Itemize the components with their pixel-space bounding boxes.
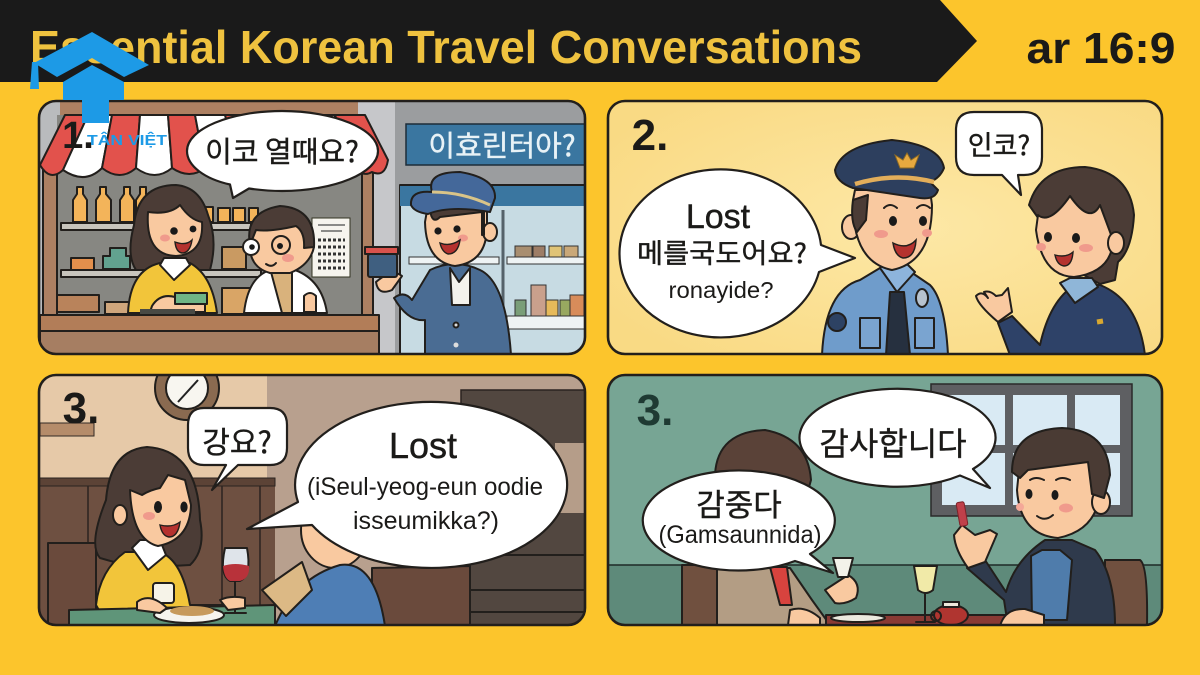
poster (312, 218, 350, 277)
panel 1: shop (38, 100, 588, 355)
panel 3 frame (39, 375, 585, 625)
window (931, 384, 1132, 516)
speech bubble: thanks (800, 389, 996, 488)
title banner (0, 0, 977, 82)
bottles on upper shelf (73, 187, 258, 222)
man from behind (261, 526, 471, 624)
speech bubble: shop: 이코 열때요? (205, 129, 359, 171)
aspect ratio label: ar 16:9 (1026, 24, 1176, 73)
restaurant room (38, 374, 587, 626)
panel 4 frame (608, 375, 1162, 625)
sign: 이효린터아? (428, 123, 576, 165)
wine glass (220, 548, 249, 613)
speech bubble: Lost: isseumikka?) (353, 507, 499, 535)
woman with wine (94, 446, 223, 608)
woman in navy (976, 167, 1145, 355)
counter (40, 315, 379, 355)
panel 4 number: 3. (637, 386, 673, 435)
speech bubble: Gamsaunnida: 감중다 (696, 480, 782, 525)
shelves (57, 223, 261, 314)
plate and cup (137, 583, 224, 623)
chair (48, 543, 96, 625)
panel 3: restaurant (38, 356, 587, 626)
conductor (365, 172, 511, 355)
speech bubble: Gamsaunnida: (Gamsaunnida) (658, 521, 822, 549)
panel 2 number: 2. (632, 111, 668, 160)
police officer (822, 140, 948, 355)
wall (608, 374, 1164, 626)
man with glasses (243, 206, 327, 313)
speech bubble: Lost: Lost (686, 198, 751, 236)
panel 1 number: 1. (62, 115, 94, 157)
panel 2: police (608, 100, 1164, 355)
speech bubble: thanks: 감사합니다 (819, 419, 967, 465)
speech bubble: small (956, 112, 1042, 195)
logo: Tan Viet: TÂN VIỆT (87, 131, 167, 149)
speech bubble: Lost: (iSeul-yeog-eun oodie (307, 473, 543, 501)
champagne glass (914, 566, 937, 622)
speech bubble: Lost: 메를국도어요? (637, 232, 807, 271)
woman in yellow (128, 185, 217, 314)
panel 1 frame (39, 101, 585, 354)
shop wall background (38, 100, 586, 355)
table (825, 608, 1045, 624)
speech bubble: small: 인코? (968, 124, 1030, 163)
panel 3 number: 3. (63, 384, 99, 433)
speech bubble: Lost: ronayide? (668, 277, 774, 303)
logo: Tan Viet (30, 32, 167, 149)
speech bubble: Lost: Lost (389, 425, 457, 466)
clock (154, 376, 220, 421)
table (69, 605, 275, 626)
awning (40, 115, 388, 177)
speech bubble: Gamsaunnida (643, 470, 835, 573)
right man (954, 428, 1147, 626)
title: Essential Korean Travel Conversations (30, 21, 862, 73)
panel 2 frame (608, 101, 1162, 354)
speech bubble: Lost (620, 169, 855, 337)
speech bubble: Lost (247, 402, 567, 568)
speech bubble: shop (187, 111, 378, 198)
left man seen from behind (682, 430, 858, 626)
panel 4: dinner (608, 374, 1164, 627)
fridge (400, 185, 586, 355)
speech bubble: small: 강요? (202, 418, 272, 462)
teapot (931, 602, 968, 625)
speech bubble: small (188, 408, 287, 490)
panel 2 background (608, 100, 1164, 355)
